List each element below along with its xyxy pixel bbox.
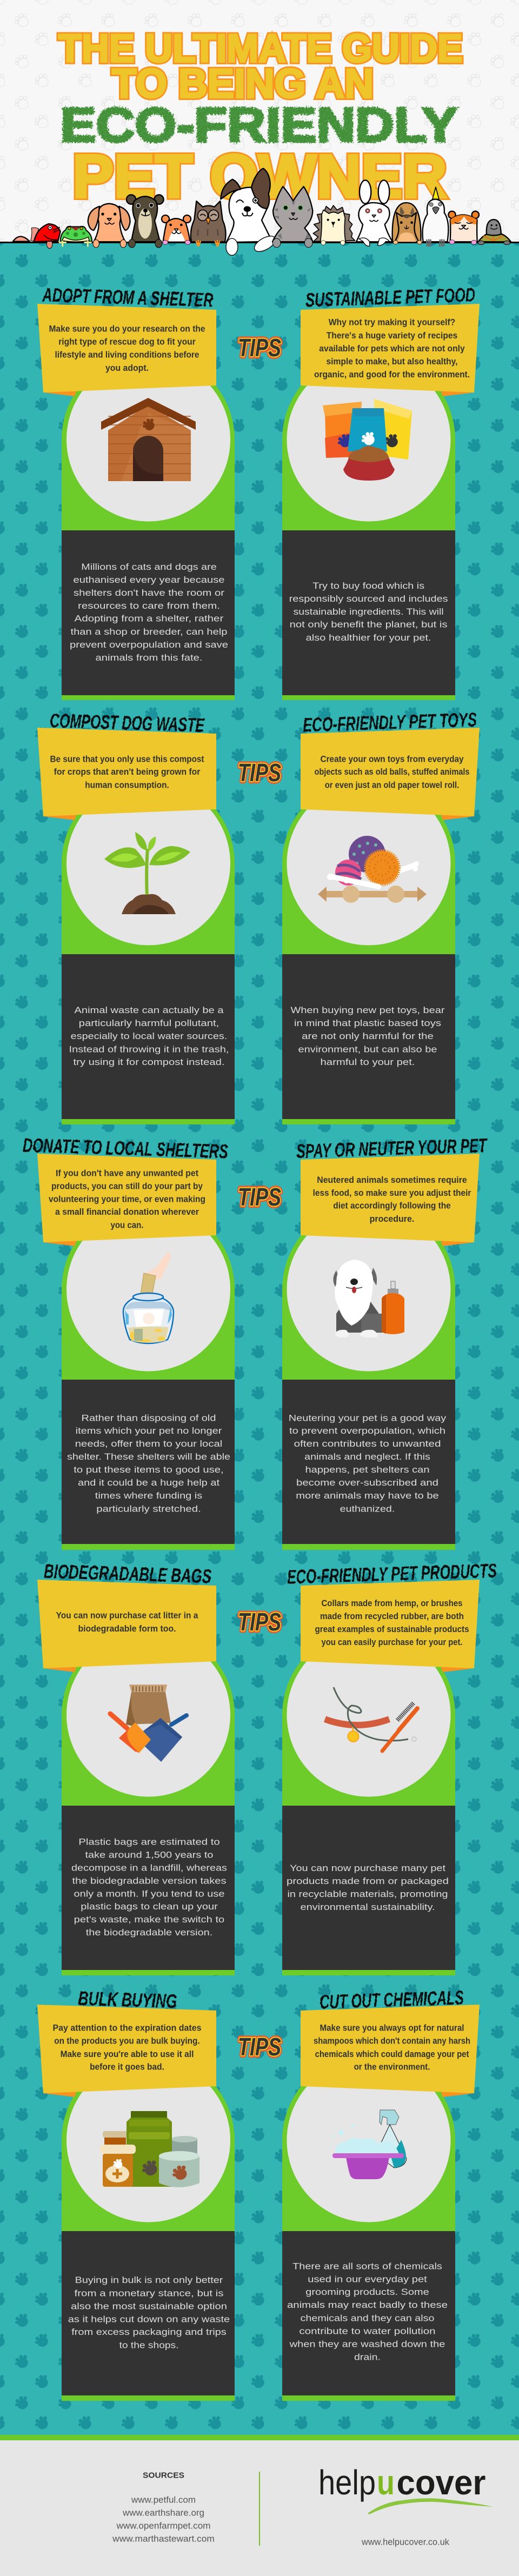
tip text: Make sure you always opt for natural	[320, 2023, 464, 2033]
tip text	[53, 2023, 201, 2072]
tip text: Be sure that you only use this compost	[50, 754, 204, 764]
body text: decompose in a landfill, whereas	[71, 1862, 227, 1873]
tip text: If you don't have any unwanted pet	[56, 1169, 198, 1179]
body text	[287, 1863, 449, 1912]
body text: contribute to water pollution	[299, 2326, 436, 2336]
icon: floppy-eared dog	[88, 204, 130, 248]
icon: spray bottle and wash bowl	[331, 2110, 407, 2179]
icon: brown bear	[127, 195, 164, 248]
title line: pet owner: PET OWNER	[72, 142, 447, 210]
tip text: volunteering your time, or even making	[49, 1194, 205, 1204]
body text: products made from or packaged	[287, 1876, 449, 1886]
tip text: Make sure you do your research on the	[49, 324, 205, 334]
body text	[289, 1413, 447, 1514]
icon: sheepdog and spray bottle	[333, 1260, 404, 1337]
card shape	[62, 353, 235, 700]
body text: responsibly sourced and includes	[289, 594, 448, 604]
helpucover logo: cover	[397, 2463, 485, 2502]
yellow tip box	[37, 2005, 216, 2093]
body text	[70, 562, 228, 663]
card shape	[282, 1203, 455, 1550]
body text: Rather than disposing of old	[81, 1413, 216, 1423]
icon: hamster	[162, 215, 191, 244]
icon: hedgehog	[313, 205, 355, 245]
body text: the biodegradable version takes	[72, 1875, 226, 1886]
tip text: Pay attention to the expiration dates	[53, 2023, 201, 2033]
icon: pet food bags and bowl	[323, 399, 412, 481]
icon: cockatoo	[423, 187, 448, 246]
tip text	[56, 1611, 198, 1634]
tip text: lifestyle and living conditions before	[55, 350, 199, 360]
body text: environment, but can also be	[298, 1044, 437, 1054]
helpucover logo	[318, 2463, 493, 2514]
tip text: Make sure you're able to use it all	[61, 2049, 194, 2059]
sources list: www.earthshare.org	[122, 2507, 204, 2518]
tip text: simple to make, but also healthy,	[327, 357, 457, 367]
panel: donate to local shelters	[22, 1134, 235, 1550]
helpucover logo: help	[318, 2463, 376, 2502]
tip text: procedure.	[370, 1214, 414, 1224]
yellow tip box	[37, 728, 216, 816]
body text: used in our everyday pet	[308, 2274, 427, 2284]
tip text: products, you can still do your part by	[51, 1181, 203, 1191]
icon: tips badge row 5: TIPS	[238, 2033, 281, 2061]
tip text: for crops that aren't being grown for	[54, 767, 201, 777]
body text: to put these items to good use,	[74, 1465, 224, 1475]
icon: frog	[59, 227, 92, 246]
body text: When buying new pet toys, bear	[291, 1005, 445, 1015]
card shape	[282, 2054, 455, 2401]
body text: the biodegradable version.	[86, 1927, 212, 1938]
orange ribbon	[441, 814, 474, 820]
sources list: SOURCES	[143, 2471, 184, 2480]
yellow tip box	[301, 304, 480, 392]
body text: plastic bags to clean up your	[81, 1901, 218, 1912]
sources list: www.openfarmpet.com	[116, 2520, 211, 2531]
body text: only a month. If you tend to use	[74, 1888, 225, 1899]
orange ribbon	[441, 1240, 474, 1246]
body text: You can now purchase many pet	[290, 1863, 445, 1873]
header panel	[0, 0, 519, 242]
orange ribbon	[43, 1666, 77, 1672]
body text: in mind that plastic based toys	[294, 1018, 441, 1028]
body text: animals and neglect. If this	[304, 1452, 430, 1462]
card shape	[62, 1203, 235, 1550]
body text: prevent overpopulation and save	[70, 640, 228, 650]
body text	[289, 581, 448, 643]
tip text: shampoos which don't contain any harsh	[314, 2036, 470, 2046]
body text: particularly harmful pollutant,	[79, 1018, 219, 1028]
body text: than a shop or breeder, can help	[70, 627, 227, 637]
body text: animals may react badly to these	[287, 2300, 448, 2310]
card shape	[62, 2054, 235, 2401]
body text: There are all sorts of chemicals	[292, 2261, 442, 2271]
body text: in recyclable materials, promoting	[288, 1889, 448, 1899]
orange ribbon	[43, 1240, 77, 1246]
body text: grooming products. Some	[305, 2287, 429, 2297]
heading: COMPOST DOG WASTE	[49, 709, 205, 736]
icon: tips badge row 1: TIPS	[238, 334, 281, 362]
yellow tip box	[301, 1580, 480, 1668]
icon: pet food containers	[100, 2111, 199, 2187]
tip text: you can.	[110, 1221, 144, 1230]
yellow tip box	[301, 728, 480, 816]
icon: litter bag and scoops	[110, 1685, 187, 1762]
icon: owl	[191, 201, 226, 246]
body text: harmful to your pet.	[320, 1057, 415, 1067]
heading: DONATE TO LOCAL SHELTERS	[22, 1134, 229, 1162]
icon: sprout in soil	[104, 832, 190, 914]
card shape	[282, 353, 455, 700]
card shape	[62, 1628, 235, 1975]
body text: are not only harmful for the	[302, 1031, 434, 1041]
body text: drain.	[354, 2352, 381, 2362]
panel: bulk buying	[37, 1987, 235, 2401]
tip text	[50, 754, 204, 790]
body text: Adopting from a shelter, rather	[75, 614, 224, 624]
body text	[287, 2261, 448, 2362]
body text: chemicals and they can also	[301, 2313, 435, 2323]
body text	[291, 1005, 445, 1067]
tip text	[314, 2023, 470, 2072]
sources list: www.petful.com	[131, 2494, 196, 2505]
tip text: diet accordingly following the	[333, 1201, 451, 1211]
body text: not only benefit the planet, but is	[290, 620, 448, 629]
tip text	[314, 318, 470, 380]
body text: especially to local water sources.	[71, 1031, 227, 1041]
body text: Animal waste can actually be a	[75, 1005, 224, 1015]
orange ribbon	[441, 2091, 474, 2097]
orange ribbon	[43, 2091, 77, 2097]
tip text: you can easily purchase for your pet.	[321, 1638, 463, 1647]
tip text: human consumption.	[85, 780, 169, 790]
orange ribbon	[441, 390, 474, 396]
tip text: objects such as old balls, stuffed animals	[315, 767, 469, 777]
body text: often contributes to unwanted	[294, 1439, 441, 1449]
body text: euthanized.	[340, 1503, 395, 1514]
tip text: Collars made from hemp, or brushes	[321, 1599, 463, 1608]
icon: tips badge row 3: TIPS	[238, 1183, 281, 1211]
orange ribbon	[441, 1666, 474, 1672]
panel: sustainable pet food	[282, 284, 480, 700]
body text: items which your pet no longer	[76, 1426, 222, 1436]
tip text	[49, 324, 205, 373]
body text: Instead of throwing it in the trash,	[69, 1044, 229, 1054]
icon: tips badge row 2: TIPS	[238, 758, 281, 787]
body text: happens, pet shelters can	[305, 1465, 429, 1475]
yellow tip box	[37, 304, 216, 392]
body text: particularly stretched.	[96, 1503, 201, 1514]
tip text: less food, so make sure you adjust their	[313, 1188, 471, 1198]
icon: pet toys	[318, 836, 427, 903]
title line: to being an: TO BEING AN	[112, 61, 374, 107]
body text	[68, 2275, 230, 2350]
tip text: Neutered animals sometimes require	[317, 1175, 467, 1185]
tip text: on the products you are bulk buying.	[54, 2036, 200, 2046]
body text: when they are washed down the	[289, 2339, 445, 2349]
tip text: you adopt.	[105, 363, 149, 373]
icon: donation jar	[123, 1252, 174, 1343]
icon: fish	[13, 224, 61, 249]
panel: spay or neuter your pet	[282, 1134, 488, 1550]
tip text: available for pets which are not only	[319, 344, 465, 354]
icon: orange and white hamster	[448, 211, 479, 244]
card shape	[282, 777, 455, 1124]
tip text: a small financial donation wherever	[55, 1207, 199, 1217]
body text: Try to buy food which is	[312, 581, 424, 591]
body text: environmental sustainability.	[301, 1902, 435, 1912]
yellow tip box	[37, 1154, 216, 1242]
tip text: chemicals which could damage your pet	[315, 2049, 469, 2059]
icon: tips badge row 2: TIPS	[238, 758, 281, 787]
tip text	[315, 754, 469, 790]
body text: and it could be a huge help at	[78, 1477, 219, 1488]
heading: ADOPT FROM A SHELTER	[42, 284, 214, 311]
icon: tips badge row 4: TIPS	[238, 1608, 281, 1636]
body text: take around 1,500 years to	[85, 1849, 213, 1860]
icon: kennel	[101, 398, 196, 481]
animals row	[13, 169, 511, 255]
body text	[71, 1836, 227, 1938]
icon: white rabbit	[356, 180, 392, 246]
body text: also healthier for your pet.	[306, 633, 431, 643]
body text: as it helps cut down on any waste	[68, 2314, 230, 2325]
body text: pet's waste, make the switch to	[74, 1914, 224, 1925]
body text: sustainable ingredients. This will	[294, 607, 444, 617]
tip text	[315, 1599, 469, 1647]
tip text: biodegradable form too.	[78, 1624, 176, 1634]
body text: become over-subscribed and	[296, 1477, 438, 1488]
tip text: great examples of sustainable products	[315, 1625, 469, 1634]
body text: to the shops.	[119, 2340, 178, 2350]
icon: tips badge row 5: TIPS	[238, 2033, 281, 2061]
panel: compost dog waste	[37, 709, 235, 1124]
card shape	[62, 777, 235, 1124]
body text: animals from this fate.	[95, 653, 202, 663]
title line: pet owner: PET OWNER	[72, 142, 447, 210]
tip text: before it goes bad.	[90, 2062, 164, 2072]
icon: tips badge row 4: TIPS	[238, 1608, 281, 1636]
yellow tip box	[37, 1580, 216, 1668]
panel: cut out chemicals	[282, 1986, 480, 2401]
panel: adopt from a shelter	[37, 284, 235, 700]
tip text: Create your own toys from everyday	[320, 754, 464, 764]
tip text	[49, 1169, 205, 1230]
body text: times where funding is	[95, 1490, 202, 1501]
icon: tips badge row 1: TIPS	[238, 334, 281, 362]
title line: eco-friendly in grass: ECO-FRIENDLY	[61, 98, 457, 152]
footer panel	[0, 2435, 519, 2576]
icon: collar, leash and brush	[325, 1687, 417, 1751]
body text: also the most sustainable option	[71, 2301, 227, 2311]
heading: BULK BUYING	[78, 1987, 177, 2012]
body text: resources to care from them.	[78, 601, 220, 611]
icon: tortoise	[478, 219, 511, 245]
orange ribbon	[43, 390, 77, 396]
icon: grey tabby cat	[272, 187, 313, 248]
icon: chipmunk	[392, 203, 422, 244]
helpucover logo: u	[377, 2463, 395, 2502]
body text: Millions of cats and dogs are	[81, 562, 217, 572]
tip text: made from recycled rubber, are both	[320, 1612, 464, 1621]
title line: the ultimate guide: THE ULTIMATE GUIDE	[58, 27, 463, 70]
body text: shelter. These shelters will be able	[67, 1452, 230, 1462]
body text: to prevent overpopulation, which	[289, 1426, 445, 1436]
tip text: organic, and good for the environment.	[314, 370, 470, 380]
heading: BIODEGRADABLE BAGS	[43, 1560, 212, 1587]
black ledge line	[0, 242, 519, 243]
tip text	[313, 1175, 471, 1224]
yellow tip box	[301, 2005, 480, 2093]
body text: Neutering your pet is a good way	[289, 1413, 447, 1423]
icon: white dog with brown ear	[221, 169, 278, 255]
orange ribbon	[43, 814, 77, 820]
tip text: There's a huge variety of recipes	[327, 331, 457, 341]
title line: the ultimate guide: THE ULTIMATE GUIDE	[58, 27, 463, 70]
panel: eco-friendly pet toys	[282, 708, 480, 1124]
body text: needs, offer them to your local	[75, 1439, 222, 1449]
yellow tip box	[301, 1154, 480, 1242]
tip text: Why not try making it yourself?	[329, 318, 455, 328]
body text	[67, 1413, 230, 1514]
body text: Buying in bulk is not only better	[75, 2275, 223, 2285]
body text: Plastic bags are estimated to	[78, 1836, 220, 1847]
website address: www.helpucover.co.uk	[361, 2537, 449, 2547]
panel: biodegradable bags	[37, 1560, 235, 1975]
body text	[69, 1005, 229, 1067]
tip text: You can now purchase cat litter in a	[56, 1611, 198, 1621]
body text: from excess packaging and trips	[71, 2327, 227, 2337]
body text: try using it for compost instead.	[74, 1057, 225, 1067]
tip text: or even just an old paper towel roll.	[325, 780, 459, 790]
body text: more animals may have to be	[296, 1490, 439, 1501]
card shape	[282, 1628, 455, 1975]
icon: tips badge row 3: TIPS	[238, 1183, 281, 1211]
tip text: right type of rescue dog to fit your	[58, 337, 196, 347]
body text: euthanised every year because	[74, 575, 225, 585]
panel: eco-friendly pet products	[282, 1559, 497, 1975]
tip text: or the environment.	[354, 2062, 430, 2072]
sources list: www.marthastewart.com	[112, 2533, 215, 2544]
body text: from a monetary stance, but is	[75, 2288, 224, 2298]
body text: shelters don't have the room or	[74, 588, 224, 598]
sources list	[112, 2471, 215, 2544]
title line: to being an: TO BEING AN	[112, 61, 374, 107]
